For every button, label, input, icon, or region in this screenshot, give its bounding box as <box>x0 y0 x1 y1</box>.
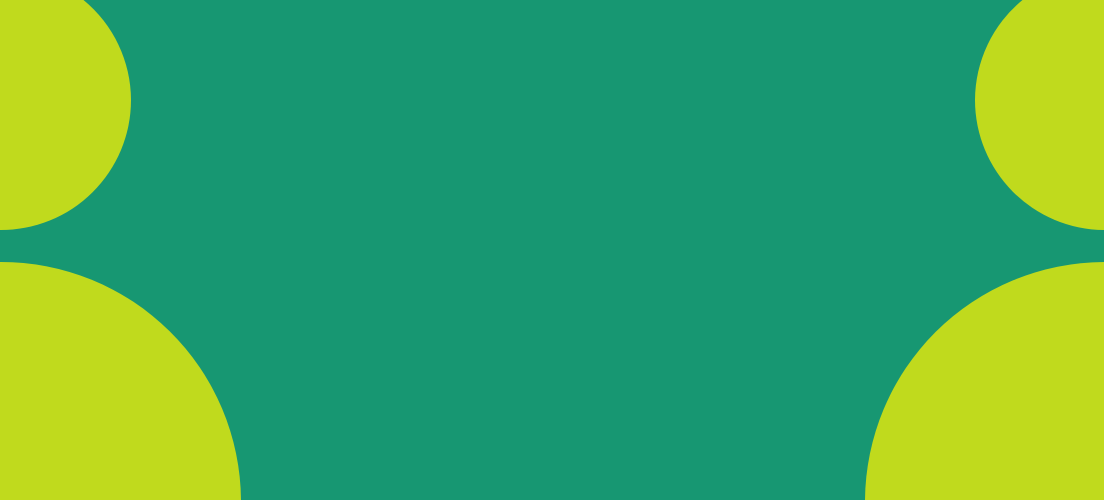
top-right circle <box>975 0 1104 230</box>
bottom-left circle <box>0 262 241 500</box>
bottom-right circle <box>865 262 1104 500</box>
top-left circle <box>0 0 131 230</box>
